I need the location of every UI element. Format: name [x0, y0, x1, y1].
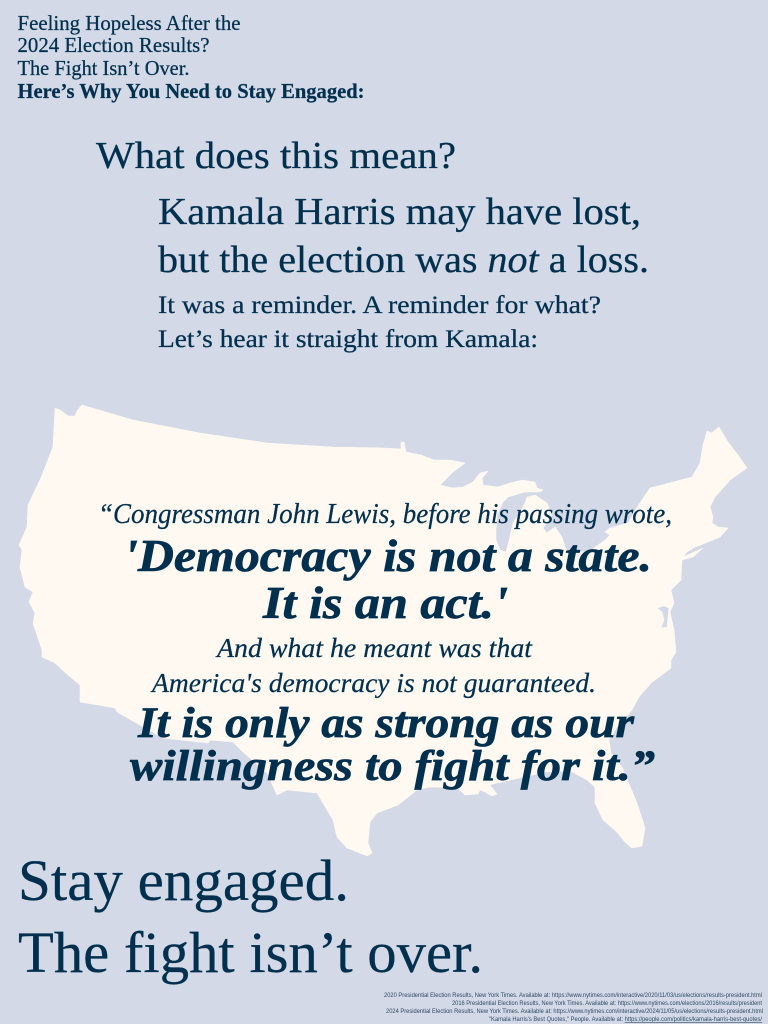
text block: Kamala Harris statement: Kamala Harris may have lost,: [158, 191, 641, 233]
text block: Kamala Harris statement: [158, 191, 649, 281]
closing call to action: The fight isn’t over.: [18, 920, 483, 985]
sources: 2020 Presidential Election Results, New York Times. Available at: https://www.nytimes.com/interactive/2020/11/03/us/elections/results-president.html: [384, 993, 762, 999]
text block: reminder: It was a reminder. A reminder for what?: [158, 292, 601, 319]
text block: Kamala Harris statement: but the election was not a loss.: [158, 239, 649, 281]
closing call to action: Stay engaged.: [18, 848, 349, 913]
quote: John Lewis and Kamala Harris: [98, 499, 672, 790]
sources: 2024 Presidential Election Results, New York Times. Available at: https://www.nytimes.com/interactive/2024/11/05/us/elections/results-president.html: [386, 1009, 763, 1015]
map: continental United States silhouette: [19, 405, 747, 856]
quote: John Lewis and Kamala Harris: And what he meant was that: [215, 633, 534, 663]
closing call to action: [18, 848, 483, 985]
heading: what does this mean: What does this mean?: [96, 135, 456, 177]
quote: John Lewis and Kamala Harris: It is only as strong as our: [137, 700, 635, 747]
sources: [384, 993, 763, 1023]
text block: reminder: [158, 292, 601, 353]
title: Feeling Hopeless After the: [18, 11, 240, 35]
title: Here’s Why You Need to Stay Engaged:: [18, 79, 364, 103]
quote: John Lewis and Kamala Harris: “Congressman John Lewis, before his passing wrote,: [98, 499, 672, 530]
quote: John Lewis and Kamala Harris: It is an act.': [262, 578, 508, 628]
sources: "Kamala Harris's Best Quotes," People. Available at: https://people.com/politics/kamala-harris-best-quotes/: [489, 1017, 762, 1023]
quote: John Lewis and Kamala Harris: willingness to fight for it.”: [130, 743, 655, 790]
quote: John Lewis and Kamala Harris: 'Democracy is not a state.: [124, 531, 652, 581]
title: 2024 Election Results?: [18, 33, 210, 57]
title: [18, 11, 364, 103]
quote: John Lewis and Kamala Harris: America's democracy is not guaranteed.: [150, 668, 596, 698]
title: The Fight Isn’t Over.: [18, 56, 190, 80]
text block: reminder: Let’s hear it straight from Kamala:: [158, 326, 538, 353]
